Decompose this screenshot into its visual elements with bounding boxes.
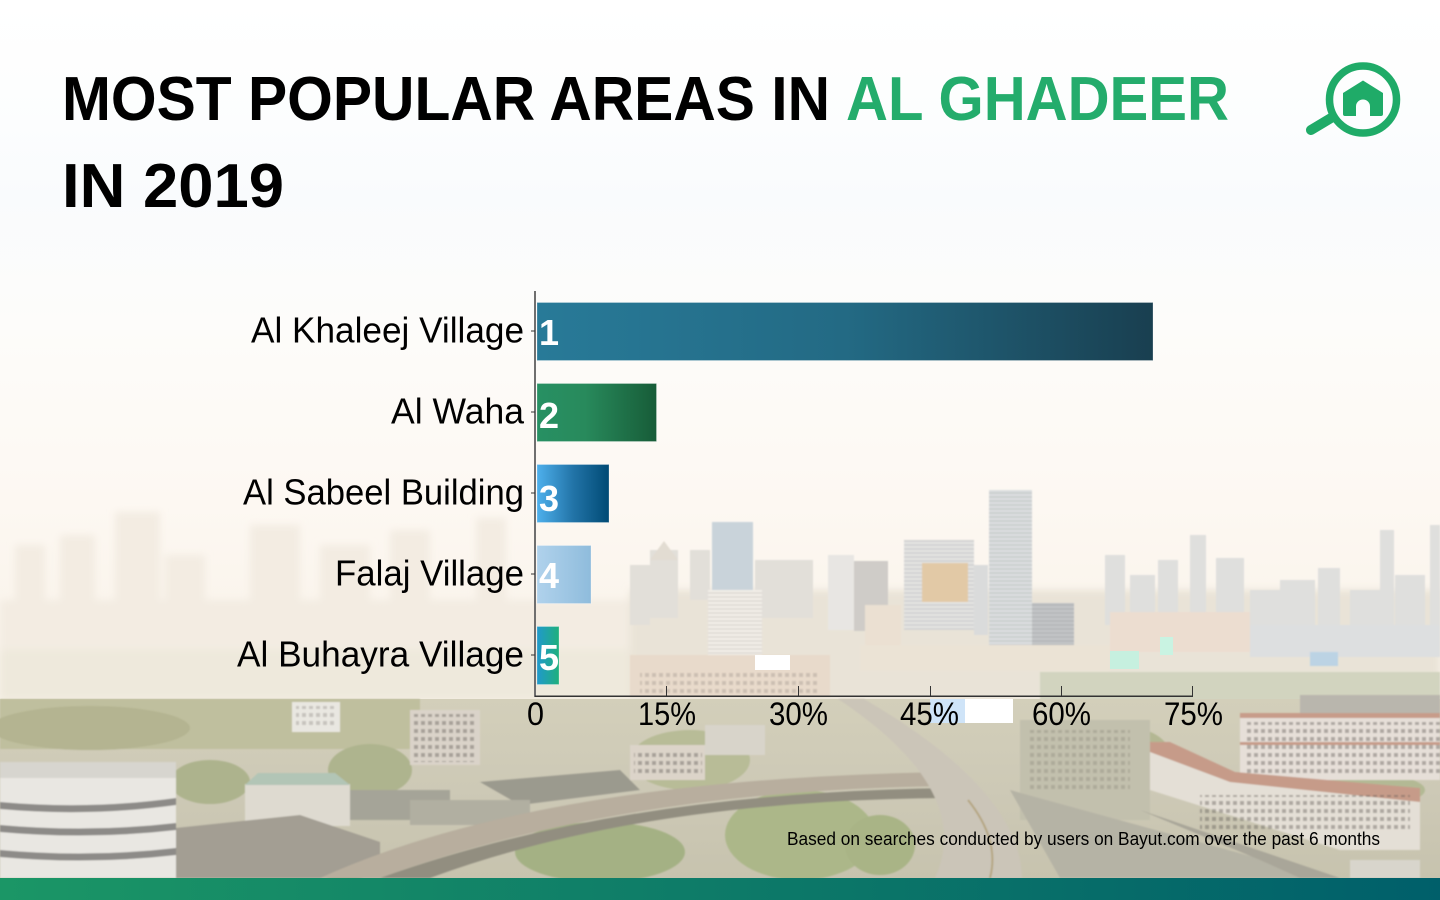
axis tick labels: 45% [900,696,959,732]
right buildings [1300,695,1440,715]
main curved road [838,699,1022,878]
axis tick labels: 15% [638,696,696,732]
footer bar [0,878,1440,900]
bar rank numbers: 4 [539,555,559,596]
title [62,65,1229,221]
axis tick labels: 75% [1164,696,1223,732]
source note: Based on searches conducted by users on Bayut.com over the past 6 months [787,829,1380,849]
far skyline right [1105,525,1440,630]
overpass [320,772,950,878]
bar rank numbers: 1 [539,312,559,353]
bar rank numbers: 3 [539,478,559,519]
low warehouses [176,815,380,878]
category labels: Falaj Village [335,552,524,594]
ground photo block [0,699,1440,879]
category labels: Al Sabeel Building [243,472,524,512]
title: AL GHADEER [846,65,1229,134]
left striped building [0,762,176,878]
photo artefact patches [755,637,1173,723]
bar rank numbers: 2 [539,395,559,436]
title: MOST POPULAR AREAS IN [62,65,830,134]
bars [537,302,1153,684]
icon: magnifier with house [1311,66,1396,133]
category labels: Al Buhayra Village [237,634,524,674]
towers [904,540,974,630]
bar rank numbers: 5 [539,637,559,678]
category labels: Al Waha [391,390,525,432]
axis tick labels [527,696,1223,732]
sheds [350,790,450,820]
bar chart [237,291,1223,732]
small buildings [410,710,480,765]
axis tick labels: 60% [1032,696,1091,732]
title: IN 2019 [62,152,284,221]
axis tick labels: 0 [527,696,544,732]
axis tick labels: 30% [769,696,828,732]
category labels [237,310,525,674]
category labels: Al Khaleej Village [251,310,524,350]
bar rank numbers [539,312,559,678]
right mid district [1020,720,1150,820]
teal roof building [245,784,350,826]
tree canopy back row [0,699,420,749]
axes [531,291,1193,697]
